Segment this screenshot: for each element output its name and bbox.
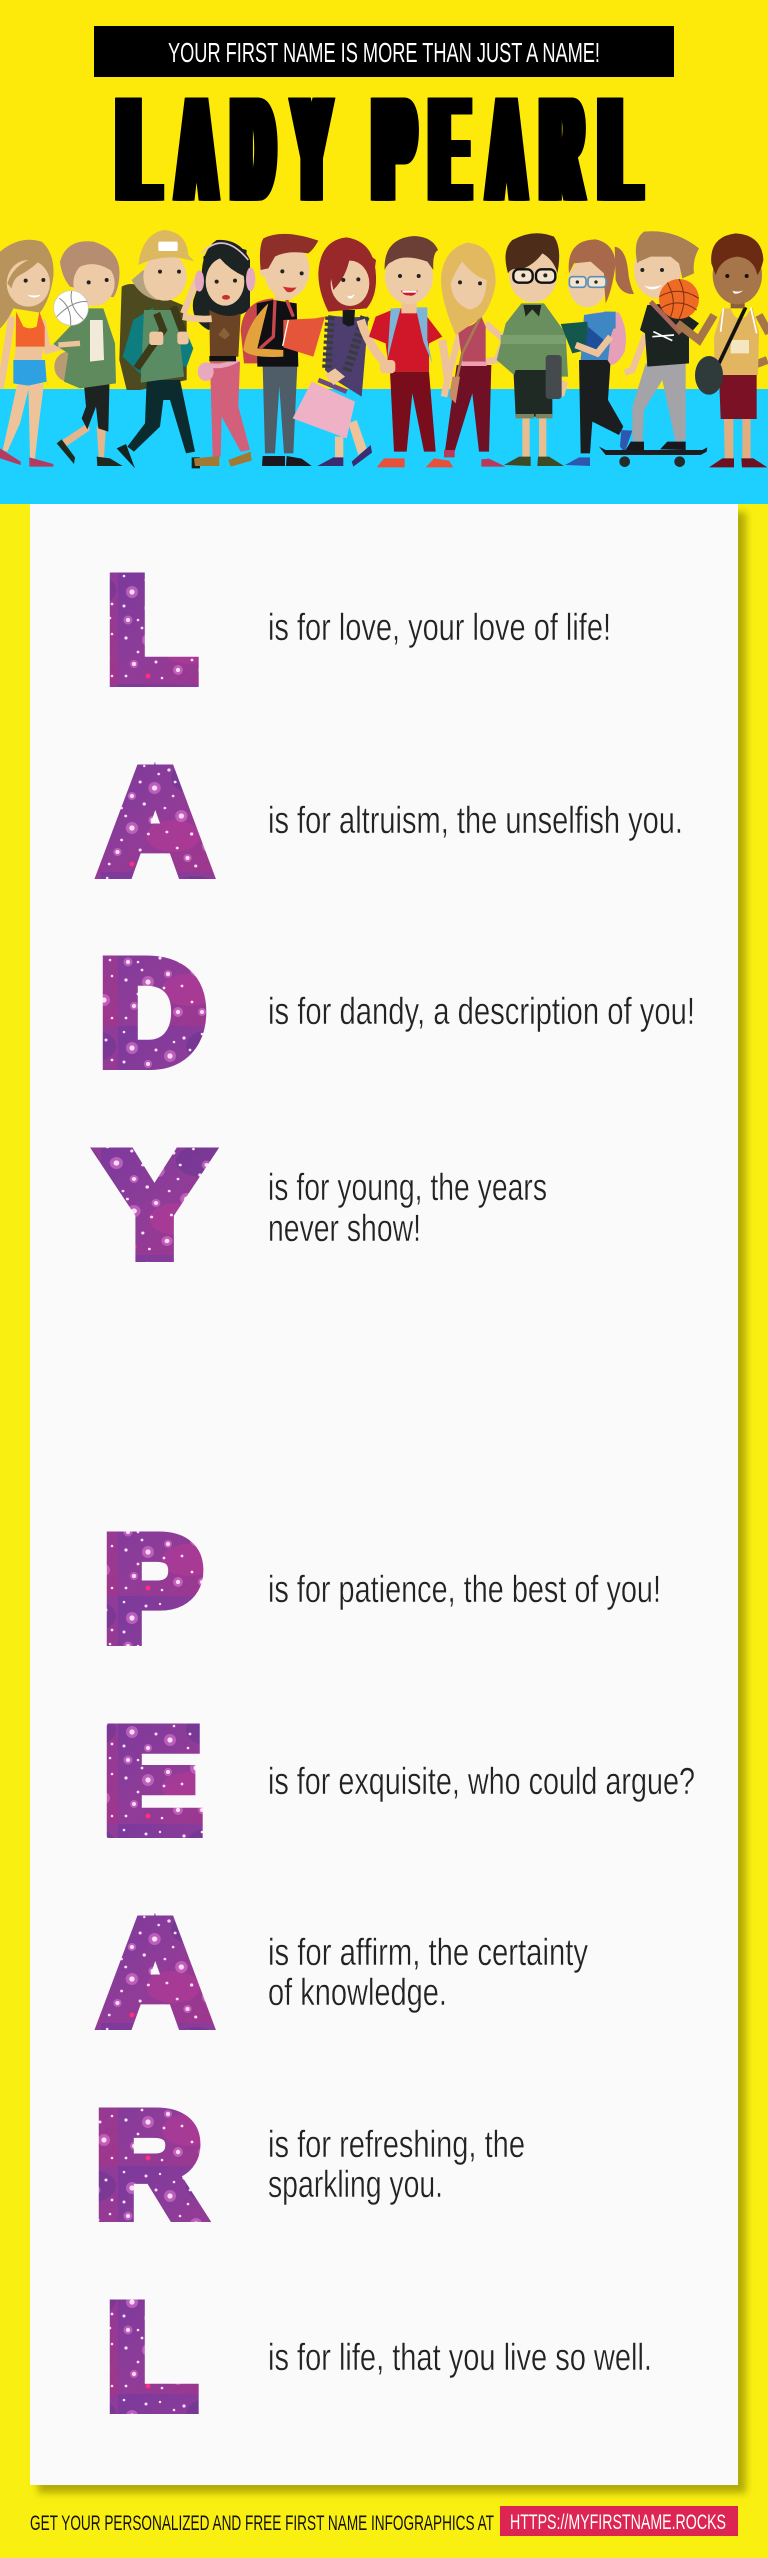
description: young: never show! [268, 1208, 421, 1250]
figure: boy with red hair and book [241, 234, 325, 466]
glitter letter A: A [101, 1892, 210, 2055]
description: affirm: is for affirm, the certainty [268, 1932, 588, 1974]
title: P [367, 66, 404, 234]
footer call to action: GET YOUR PERSONALIZED AND FREE FIRST NAME INFOGRAPHICS AT [30, 2512, 494, 2535]
row: L for love [107, 548, 611, 711]
figure: boy on skateboard with basketball [599, 231, 707, 467]
floor band [0, 389, 768, 504]
row: R for refreshing [96, 2083, 525, 2246]
figure: boy in tan jersey with bag [677, 233, 768, 467]
title: Y [286, 66, 321, 234]
row: P for patience [104, 1507, 661, 1670]
figure: girl with pink bag [293, 237, 376, 467]
description: life: is for life, that you live so well. [268, 2337, 652, 2379]
glitter letter R: R [96, 2083, 201, 2246]
panel: name meanings [30, 504, 738, 2485]
figure: boy with glasses and shorts [497, 233, 568, 466]
glitter letter Y: Y [101, 1123, 208, 1286]
header background [0, 0, 768, 389]
glitter letter D: D [100, 931, 205, 1094]
title: L [593, 66, 629, 234]
row: A for affirm [101, 1892, 588, 2055]
title: L [111, 66, 148, 234]
glitter letter L: L [107, 548, 196, 711]
row: A for altruism [101, 741, 683, 904]
figure: girl with volleyball [53, 241, 123, 466]
description: refreshing: is for refreshing, the [268, 2124, 525, 2166]
title: A [482, 66, 517, 234]
title: D [226, 66, 264, 234]
row: Y for young [101, 1123, 547, 1286]
row: D for dandy [100, 931, 695, 1094]
figure: blonde girl [441, 243, 506, 467]
footer link badge [500, 2506, 738, 2536]
description: refreshing: sparkling you. [268, 2164, 443, 2206]
tagline bar [94, 26, 674, 77]
figure: girl in orange top [0, 240, 78, 467]
illustration: group of young people [0, 230, 768, 468]
row: E for exquisite [104, 1699, 695, 1862]
title [111, 66, 646, 234]
figure: girl with ponytail and tablet [561, 239, 634, 466]
glitter letter A: A [101, 741, 210, 904]
description: love: is for love, your love of life! [268, 607, 611, 649]
title: A [171, 66, 207, 234]
description: affirm: of knowledge. [268, 1972, 447, 2014]
glitter letter P: P [104, 1507, 201, 1670]
figure: hiker with cap and backpack [117, 230, 200, 468]
figure: girl with headphones [183, 240, 255, 467]
glitter letter E: E [104, 1699, 201, 1862]
row: L for life [107, 2275, 652, 2438]
description: young: is for young, the years [268, 1167, 547, 1209]
glitter letter L: L [107, 2275, 196, 2438]
title: E [424, 66, 459, 234]
figure: boy in red shirt with backpack [361, 236, 453, 467]
title: R [535, 66, 573, 234]
